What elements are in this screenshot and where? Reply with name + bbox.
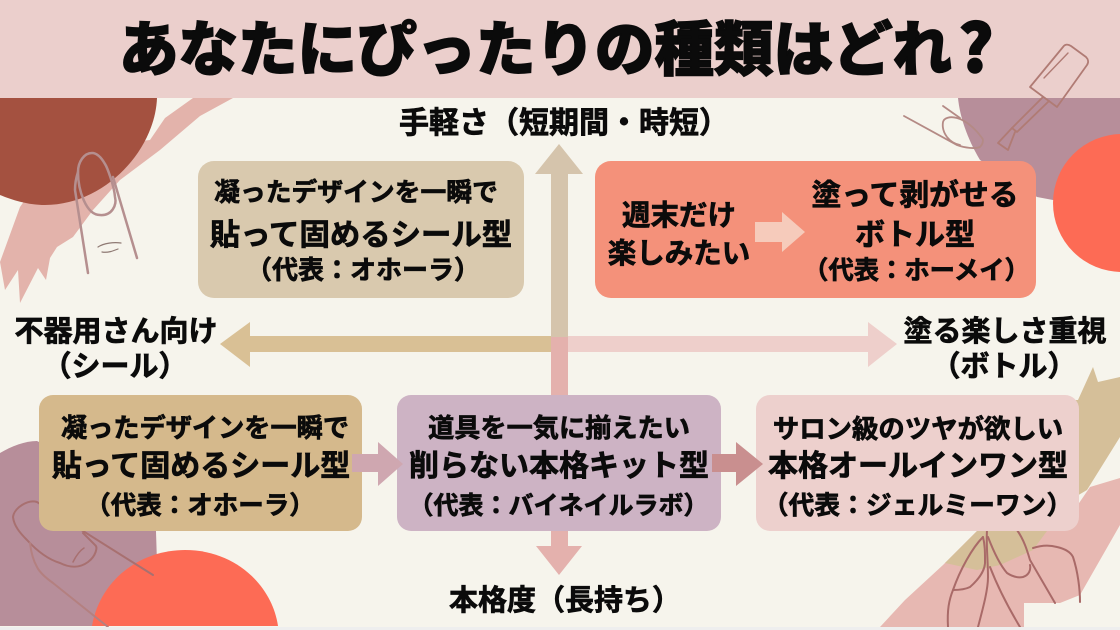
panel: top-left seal card: 貼って固めるシール型 [210,210,512,254]
arrow: weekend to bottle [755,212,805,252]
header band [0,0,1120,98]
decoration: top-right mauve blob [958,98,1120,200]
axis label: right: 塗る楽しさ重視 [903,308,1107,350]
arrow: kit to all-in-one [712,442,763,486]
panel: bottom-left seal card: 貼って固めるシール型 [52,441,350,485]
decoration: bottom-right tan brush [1060,367,1120,500]
arrow: seal to kit [352,442,403,486]
panel: bottom-center kit card: 道具を一気に揃えたい [428,407,690,445]
axis label: right [903,308,1107,385]
panel: top-left seal card: （代表：オホーラ） [246,250,480,287]
decoration: bottom edge [0,627,1120,630]
panel: bottom-right all-in-one card: サロン級のツヤが欲しい [773,407,1063,446]
axis: vertical upper arrow [535,144,583,337]
panel: top-right bottle card: （代表：ホーメイ） [803,251,1030,287]
icon: nail polish brush [998,45,1088,150]
panel: bottom-left seal card: （代表：オホーラ） [85,485,315,522]
axis: horizontal right arrow [568,322,897,367]
panel: top-left seal card: 凝ったデザインを一瞬で [214,172,498,209]
axis: vertical lower arrow [536,337,582,575]
title: あなたにぴったりの種類はどれ [119,2,952,88]
icon: finger bottom-left [13,501,153,627]
decoration: top-left brown circle [0,98,157,205]
decoration: top-right coral circle [1053,134,1120,272]
icon: finger top-left [75,153,137,273]
icon: nail outline top-right [904,106,983,148]
axis label: right: （ボトル） [931,343,1077,385]
panel: bottom-right all-in-one card: （代表：ジェルミーワン） [763,485,1072,522]
panel: bottom-right all-in-one card: 本格オールインワン型 [768,441,1068,485]
panel: top-right bottle card [595,161,1036,298]
panel: bottom-left seal card: 凝ったデザインを一瞬で [61,407,349,445]
decoration: bottom-left coral circle [92,550,278,626]
panel: top-right bottle card: 週末だけ [622,193,736,234]
panel: bottom-center kit card [397,395,721,531]
panel: bottom-right all-in-one card [756,395,1079,531]
panel: top-right bottle card: 楽しみたい [608,231,750,272]
axis label: left: 不器用さん向け [14,308,218,350]
decoration: bottom-right pink brush [880,478,1120,627]
axis label: bottom: 本格度（長持ち） [449,577,681,619]
decoration: bottom-right tan wedge [945,531,1047,570]
panel: bottom-center kit card: 削らない本格キット型 [409,441,709,485]
axis label: left: （シール） [42,343,188,385]
panel: top-right bottle card: ボトル型 [855,210,975,254]
decoration: bottom-left mauve blob [0,441,157,626]
axis label: top: 手軽さ（短期間・時短） [399,98,729,142]
panel: bottom-left seal card [39,395,362,531]
icon: fingers bottom-right [948,523,1080,627]
decoration: top-left brush stroke [0,98,233,303]
panel: top-left seal card [198,161,524,298]
axis: horizontal left arrow [220,322,551,367]
panel: bottom-center kit card: （代表：バイネイルラボ） [408,486,709,522]
panel: top-right bottle card: 塗って剥がせる [811,170,1019,214]
axis label: left [14,308,218,385]
